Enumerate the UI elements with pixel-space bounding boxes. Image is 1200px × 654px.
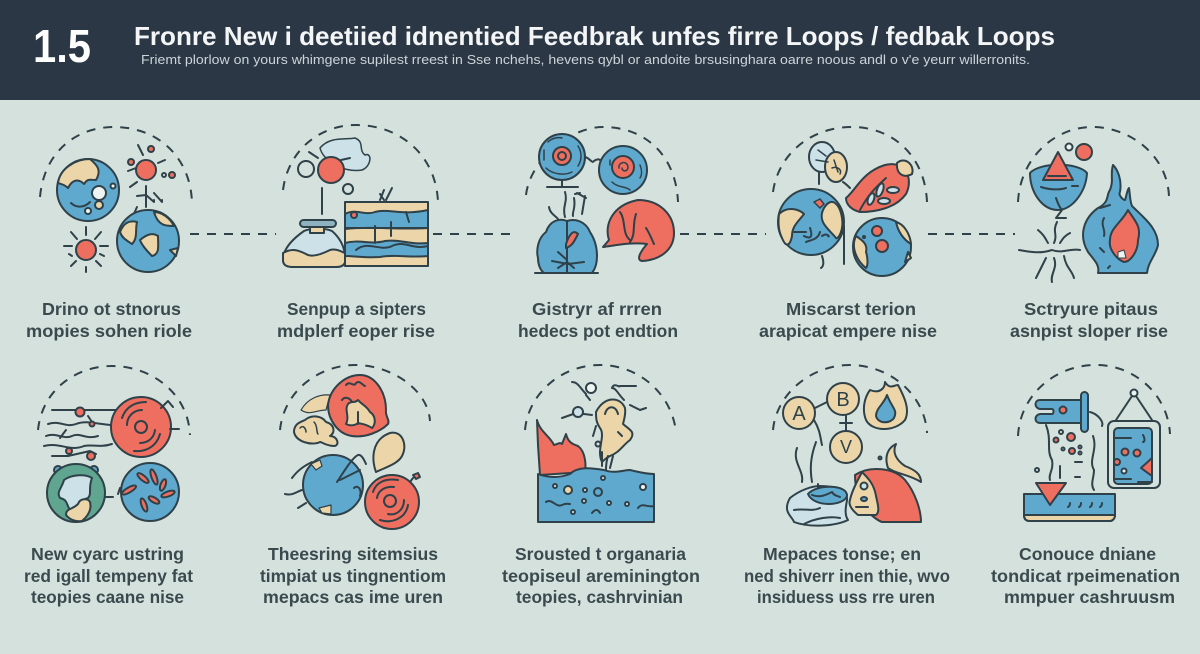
icon: letters, basin and head: B (836, 389, 850, 411)
icon: globes, tree and leaf (778, 142, 913, 276)
caption: insiduess uss rre uren (757, 587, 935, 607)
caption: Sctryure pitaus (1024, 299, 1158, 319)
caption: tondicat rpeimenation (991, 566, 1180, 586)
caption (759, 299, 937, 341)
panel: row 2 item 2 (260, 365, 446, 607)
header band (0, 0, 1200, 100)
caption (24, 544, 193, 607)
section number: 1.5 (33, 20, 91, 72)
connector 3 (680, 233, 766, 235)
caption: New cyarc ustring (31, 544, 184, 564)
caption (277, 299, 435, 341)
icon: letters, basin and head: V (840, 437, 852, 457)
caption: Senpup a sipters (287, 299, 426, 319)
caption: asnpist sloper rise (1010, 321, 1168, 341)
panel: row 2 item 1 (24, 366, 193, 607)
panel: row 2 item 4 (744, 365, 950, 607)
caption (260, 544, 446, 607)
caption: Srousted t organaria (515, 544, 686, 564)
connector 2 (433, 233, 517, 235)
caption: mdplerf eoper rise (277, 321, 435, 341)
caption (991, 544, 1180, 607)
caption: Mepaces tonse; en (763, 544, 921, 564)
panel: row 1 item 2 (277, 125, 438, 341)
panel: row 1 item 4 (759, 127, 937, 341)
icon: cells, brain and head (535, 134, 674, 273)
connector 1 (190, 233, 276, 235)
icon: globes and suns (57, 145, 179, 272)
caption: Theesring sitemsius (268, 544, 438, 564)
icon: bowl, cracks and flame (1019, 144, 1158, 282)
panel: row 2 item 5 (991, 365, 1180, 607)
caption: teopies caane nise (31, 587, 184, 607)
caption: ned shiverr inen thie, wvo (744, 566, 950, 586)
caption: timpiat us tingnentiom (260, 566, 446, 586)
caption: Miscarst terion (786, 299, 916, 319)
title: Fronre New i deetiied idnentied Feedbrak unfes firre Loops / fedbak Loops (134, 21, 1055, 51)
panel: row 2 item 3 (502, 365, 700, 607)
caption: mopies sohen riole (26, 321, 192, 341)
caption: teopiseul areminington (502, 566, 700, 586)
caption (518, 299, 678, 341)
caption: hedecs pot endtion (518, 321, 678, 341)
connector 4 (928, 233, 1015, 235)
caption (502, 544, 700, 607)
icon: letters, basin and head: A (792, 403, 806, 425)
icon: letters, basin and head (783, 382, 921, 526)
panel: row 1 item 3 (518, 127, 678, 341)
caption: teopies, cashrvinian (516, 587, 683, 607)
panel: row 1 item 5 (1010, 127, 1169, 341)
caption: arapicat empere nise (759, 321, 937, 341)
icon: flame, figure and water (537, 382, 654, 522)
subtitle: Friemt plorlow on yours whimgene supilest rreest in Sse nchehs, hevens qybl or andoite brsusinghara oarre noous andl o v'e yeurr willerronits. (141, 52, 1030, 67)
caption: red igall tempeny fat (24, 566, 193, 586)
panel: row 1 item 1 (26, 127, 192, 341)
caption: mmpuer cashruusm (1004, 587, 1175, 607)
icon: blobs, globe and target (285, 375, 420, 529)
icon: pipe, tank and tray (1024, 390, 1160, 521)
caption: Drino ot stnorus (42, 299, 181, 319)
caption (1010, 299, 1168, 341)
caption (744, 544, 950, 607)
icon: flask and soil layers (283, 138, 428, 267)
caption (26, 299, 192, 341)
caption: Conouce dniane (1019, 544, 1156, 564)
caption: Gistryr af rrren (532, 299, 662, 319)
caption: mepacs cas ime uren (263, 587, 443, 607)
icon: waves, target and globes (44, 397, 179, 522)
